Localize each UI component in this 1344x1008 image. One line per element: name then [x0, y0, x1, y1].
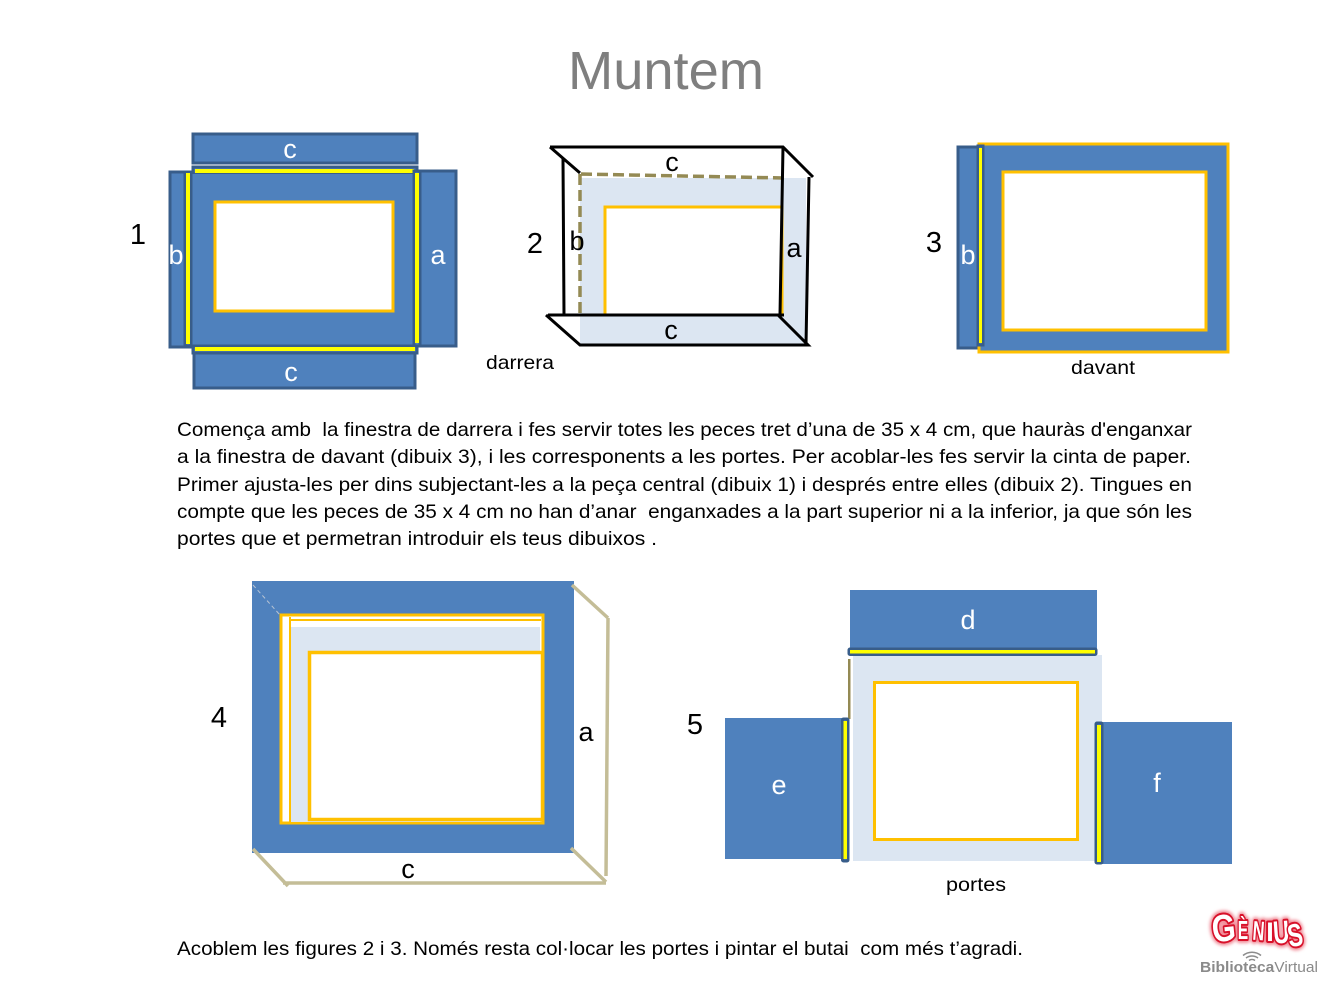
number 2: 2: [527, 228, 543, 260]
door e: [725, 718, 843, 859]
window: [215, 202, 393, 311]
number 4: 4: [211, 702, 227, 734]
instructions paragraph: Comença amb la finestra de darrera i fes servir totes les peces tret d’una de 35 x 4 cm, que hauràs d'enganxar: [177, 419, 1193, 441]
figure 3: front window: [926, 144, 1228, 379]
number 1: 1: [130, 219, 146, 251]
tape: [978, 146, 983, 345]
piece c bottom: [194, 353, 415, 388]
depth lines: [253, 585, 608, 886]
instructions paragraph: [177, 419, 1193, 550]
tape right: [414, 171, 420, 346]
window: [310, 652, 542, 820]
logo: Gènius Biblioteca Virtual: [1200, 907, 1318, 976]
instructions paragraph: portes que et permetran introduir els teus dibuixos .: [177, 528, 657, 550]
instructions paragraph: compte que les peces de 35 x 4 cm no han d’anar enganxades a la part superior ni a la inferior, ja que són les: [177, 501, 1192, 523]
door f: [1100, 722, 1232, 864]
piece labels: [401, 717, 594, 884]
tape d: [849, 649, 1096, 654]
logo caption: BibliotecaVirtual: [1200, 959, 1318, 976]
tape bottom: [193, 346, 417, 353]
central frame: [190, 174, 415, 346]
figure 4: assembled box: [211, 581, 608, 886]
figure 5: doors: [687, 590, 1232, 896]
piece label b: b: [960, 240, 976, 270]
piece labels: [168, 134, 446, 387]
door d: [850, 590, 1097, 650]
logo wordmark: [1210, 907, 1306, 954]
tape f: [1096, 723, 1102, 863]
pale panel: [580, 178, 806, 345]
logo wordmark: S: [1285, 916, 1306, 954]
piece labels: c: [284, 357, 298, 387]
caption portes: portes: [946, 874, 1006, 896]
piece c top: [193, 134, 417, 163]
window: [1003, 172, 1206, 330]
piece labels: a: [578, 717, 594, 747]
logo wordmark: I: [1266, 917, 1274, 947]
instructions paragraph: Primer ajusta-les per dins subjectant-les a la peça central (dibuix 1) i després entre elles (dibuix 2). Tingues en: [177, 474, 1192, 496]
front frame: [252, 581, 574, 853]
logo wordmark: I: [1266, 917, 1274, 947]
piece labels: c: [664, 315, 678, 345]
front frame: [979, 144, 1228, 352]
tape left: [185, 172, 191, 346]
instructions paragraph: a la finestra de davant (dibuix 3), i les corresponents a les portes. Per acoblar-les fes servir la cinta de paper.: [177, 446, 1191, 468]
closing sentence: Acoblem les figures 2 i 3. Només resta col·locar les portes i pintar el butai com més t’agradi.: [177, 938, 1023, 960]
dashed edges: [580, 174, 784, 315]
tape e: [842, 719, 848, 861]
piece labels: c: [283, 134, 297, 164]
box outline: [546, 147, 813, 345]
door labels: [771, 605, 1161, 800]
logo wordmark: G: [1210, 907, 1238, 951]
pale panel: [853, 655, 1102, 861]
piece labels: c: [665, 147, 679, 177]
piece b: [958, 147, 978, 348]
logo wordmark: G: [1210, 907, 1238, 951]
caption davant: davant: [1071, 357, 1136, 379]
tan edge: [848, 659, 850, 719]
piece a: [417, 171, 456, 346]
door labels: e: [771, 770, 787, 800]
logo wordmark: N: [1252, 915, 1266, 946]
piece labels: b: [569, 226, 585, 256]
door labels: d: [960, 605, 976, 635]
piece labels: [569, 147, 802, 345]
window: [874, 682, 1078, 840]
logo wordmark: U: [1272, 914, 1291, 950]
piece b: [170, 172, 191, 347]
pale back panel: [291, 627, 540, 822]
logo wordmark: È: [1238, 915, 1248, 945]
inner opening: [281, 615, 543, 823]
logo wordmark: N: [1252, 915, 1266, 946]
logo wordmark: U: [1272, 914, 1291, 950]
piece labels: a: [786, 233, 802, 263]
piece labels: c: [401, 854, 415, 884]
window: [605, 207, 782, 315]
logo wordmark: È: [1238, 915, 1248, 945]
piece labels: b: [168, 240, 184, 270]
piece labels: a: [430, 240, 446, 270]
inner edges: [290, 617, 541, 822]
figure 2: back window in perspective: [486, 147, 813, 374]
wifi icon: [1243, 952, 1261, 960]
dashed corner: [253, 585, 280, 615]
logo wordmark: S: [1285, 916, 1306, 954]
tape top: [193, 167, 417, 174]
number 5: 5: [687, 709, 703, 741]
number 3: 3: [926, 227, 942, 259]
figure 1: flat frame with strips: [130, 134, 456, 388]
caption darrera: darrera: [486, 352, 554, 374]
door labels: f: [1153, 768, 1161, 798]
title: Muntem: [568, 41, 764, 101]
